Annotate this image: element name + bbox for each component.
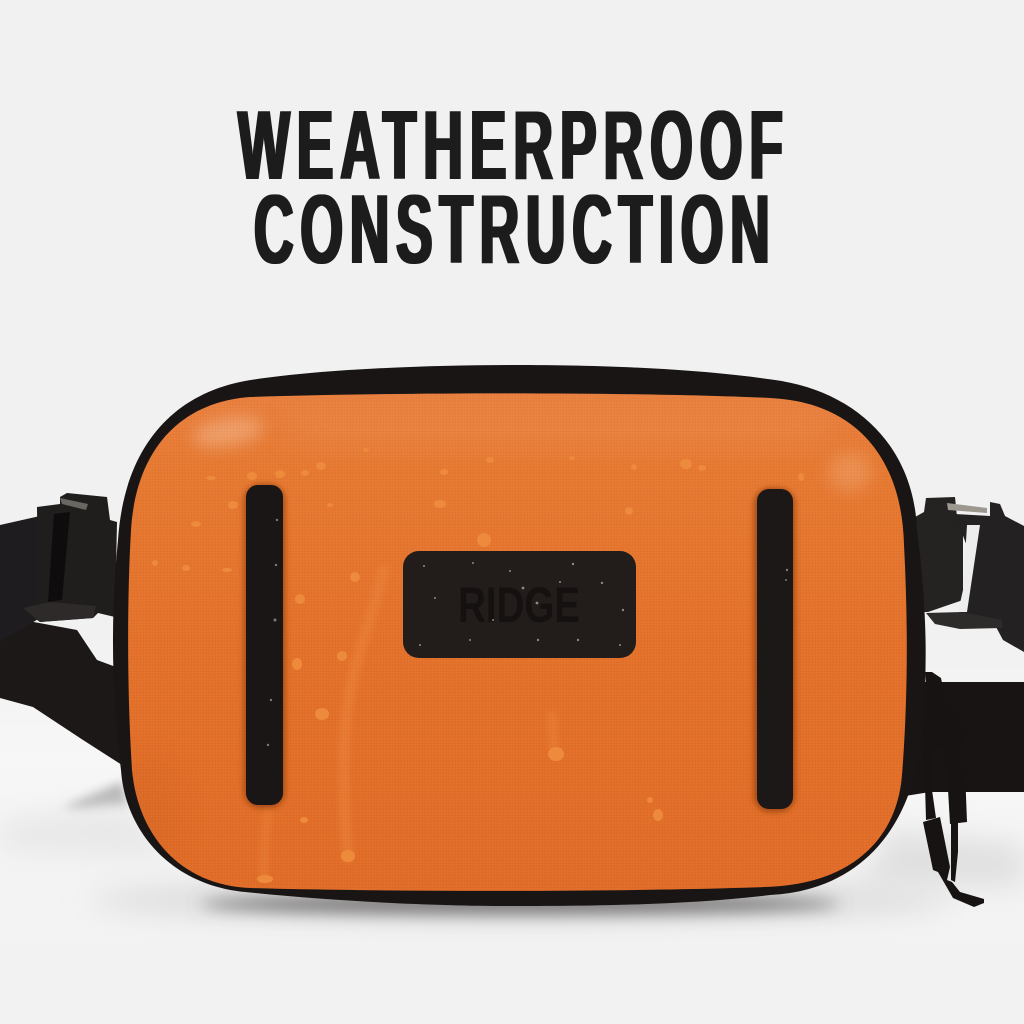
title line 1: WEATHERPROOF <box>238 90 783 200</box>
zipper stem <box>951 822 958 882</box>
buckle frame and strap <box>955 502 1024 652</box>
buckle left block <box>915 497 963 612</box>
right slot <box>757 489 793 809</box>
lower strap band <box>0 620 122 765</box>
bag <box>113 365 984 907</box>
logo patch <box>403 551 636 658</box>
right glare <box>828 452 872 492</box>
buckle <box>23 493 117 622</box>
zipper lower tab <box>923 817 984 907</box>
soft wide floor shadow <box>90 880 950 920</box>
left slot <box>246 485 283 805</box>
buckle metal pin <box>60 498 88 510</box>
water run main <box>344 570 384 858</box>
left strap <box>0 493 122 765</box>
title line 2: CONSTRUCTION <box>254 174 770 284</box>
shell shading and gloss <box>120 393 907 891</box>
slot wet highlights <box>267 519 788 746</box>
left floor haze <box>0 805 170 860</box>
floor shadows <box>0 782 1024 920</box>
patch wet specks <box>419 562 624 646</box>
title <box>238 90 783 284</box>
right slot halo <box>754 488 795 812</box>
zipper rim <box>113 365 926 906</box>
upper strap band <box>0 516 40 642</box>
zipper upper tab <box>947 770 967 824</box>
logo text: RIDGE <box>458 577 580 633</box>
fabric weave <box>128 393 907 891</box>
orange shell <box>128 393 907 891</box>
zipper top loop and slider <box>923 672 962 790</box>
zipper pull <box>923 672 984 907</box>
left glare <box>190 412 266 452</box>
water run left <box>264 806 268 880</box>
left strap shadow <box>62 782 128 810</box>
water run center <box>552 712 554 750</box>
buckle gap <box>958 525 980 612</box>
infographic scene <box>0 110 1024 928</box>
zipper cord <box>924 750 936 820</box>
bottom shadow <box>200 894 840 914</box>
top sheen <box>290 412 830 446</box>
right strap <box>900 497 1024 796</box>
buckle slot <box>48 512 70 602</box>
lower strap band <box>900 682 1024 796</box>
buckle metal pin <box>947 503 987 513</box>
water droplets <box>152 448 804 883</box>
left slot halo <box>244 484 285 808</box>
right floor shadow <box>860 830 1024 890</box>
lower left shade <box>120 755 180 875</box>
buckle lower bar <box>23 602 96 622</box>
buckle lower bar <box>926 612 1002 629</box>
